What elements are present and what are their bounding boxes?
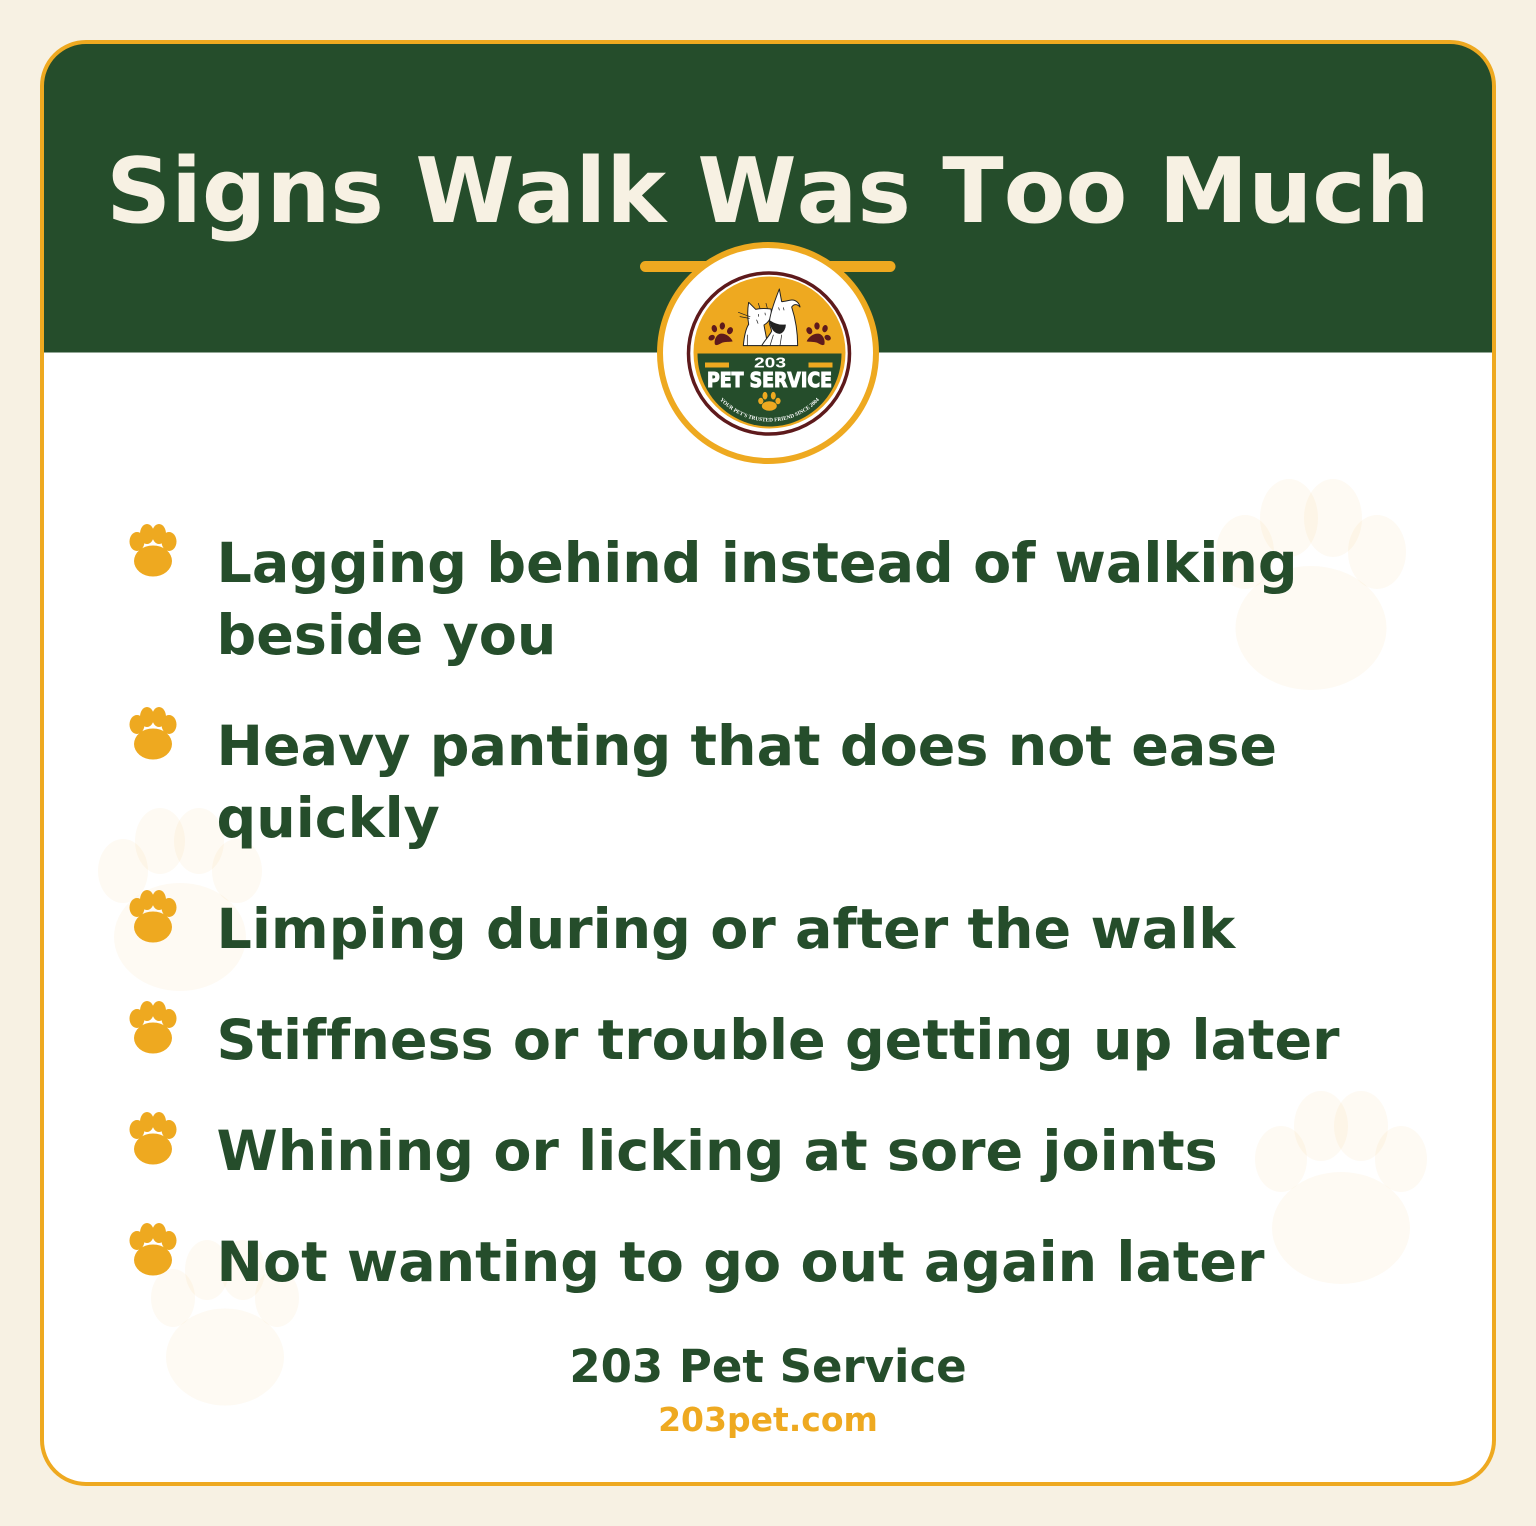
logo text: 203: 203 bbox=[754, 354, 786, 372]
icon: paw bullet bbox=[130, 890, 176, 942]
title underline bbox=[640, 261, 896, 272]
list item 5 bbox=[130, 1112, 1218, 1184]
item text: Stiffness or trouble getting up later bbox=[216, 1008, 1340, 1073]
item text: beside you bbox=[216, 603, 556, 668]
icon: paw bullet bbox=[130, 524, 176, 576]
icon: paw bullet bbox=[130, 1001, 176, 1054]
icon: left paw bbox=[707, 322, 734, 345]
logo green panel bbox=[698, 354, 842, 426]
title: Signs Walk Was Too Much bbox=[106, 139, 1430, 244]
footer brand name: 203 Pet Service bbox=[569, 1340, 967, 1393]
icon: right paw bbox=[805, 322, 832, 345]
item text: Lagging behind instead of walking bbox=[216, 531, 1298, 596]
list item 1 bbox=[130, 524, 1298, 668]
icon: paw bullet bbox=[130, 1223, 176, 1276]
badge outer ring bbox=[660, 245, 876, 461]
item text: Not wanting to go out again later bbox=[216, 1230, 1265, 1295]
panel: header band bbox=[42, 42, 1494, 352]
icon: paw bullet bbox=[130, 1112, 176, 1164]
logo ring bbox=[688, 273, 850, 434]
logo badge bbox=[657, 242, 879, 464]
list item 2 bbox=[130, 707, 1277, 851]
logo left dash bbox=[705, 362, 729, 368]
icon: logo small paw bbox=[758, 392, 781, 411]
list item 3 bbox=[130, 890, 1236, 962]
item text: quickly bbox=[216, 786, 440, 851]
watermark paw: bottom left bbox=[151, 1240, 299, 1406]
cat bbox=[743, 302, 771, 346]
whiskers and fur lines bbox=[738, 303, 798, 346]
icon: cat and dog bbox=[738, 289, 800, 346]
dog bbox=[762, 289, 800, 346]
item text: Whining or licking at sore joints bbox=[216, 1119, 1218, 1184]
list item 6 bbox=[130, 1223, 1265, 1295]
item text: Heavy panting that does not ease bbox=[216, 714, 1277, 779]
item text: Limping during or after the walk bbox=[216, 897, 1236, 962]
list item 4 bbox=[130, 1001, 1340, 1073]
dog mouth bbox=[770, 321, 785, 333]
watermark paw: lower right bbox=[1255, 1091, 1427, 1284]
watermark paw: top right bbox=[1216, 479, 1406, 690]
logo tagline: YOUR PET'S TRUSTED FRIEND SINCE 2004 bbox=[720, 398, 819, 422]
watermark paw: middle left bbox=[98, 808, 262, 991]
logo right dash bbox=[808, 362, 832, 368]
icon: paw bullet bbox=[130, 707, 176, 760]
footer website: 203pet.com bbox=[658, 1400, 878, 1439]
logo gold disc bbox=[694, 276, 846, 428]
logo text: pet service: PET SERVICE bbox=[707, 368, 832, 392]
